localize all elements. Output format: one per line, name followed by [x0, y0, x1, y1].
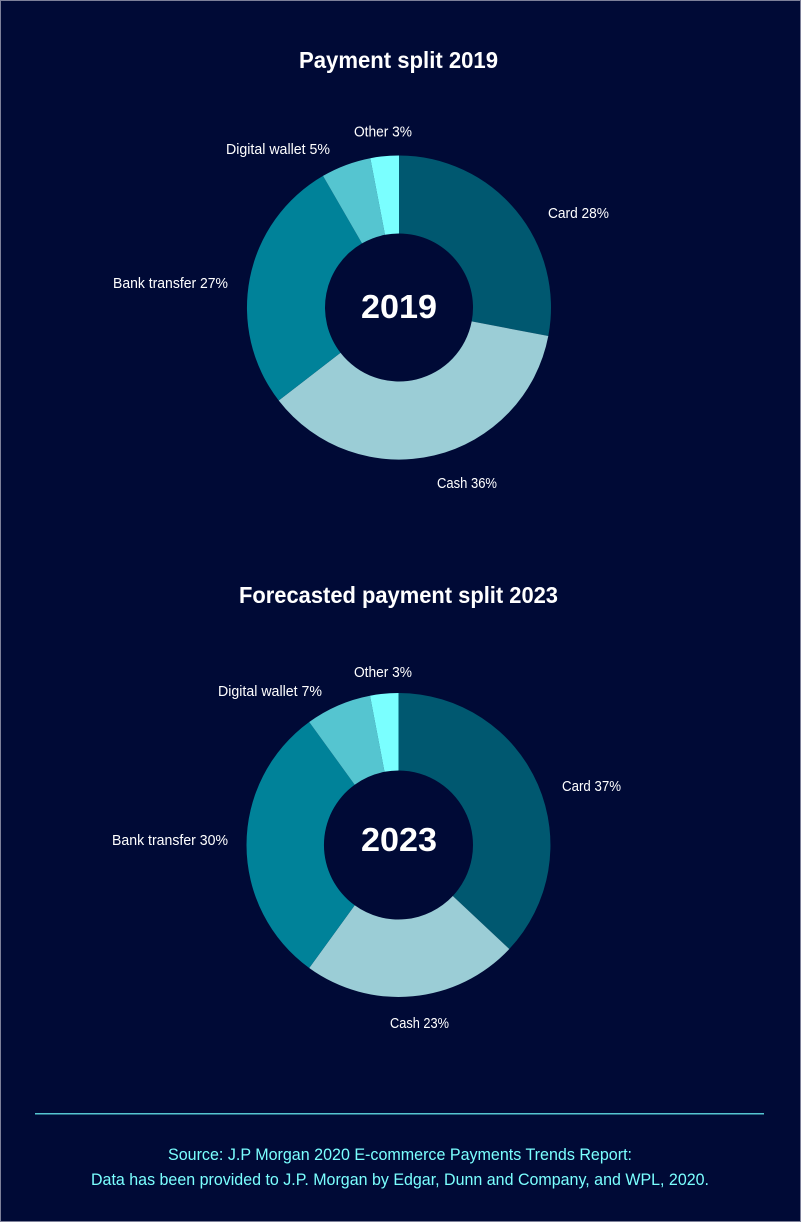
segment: digital wallet 7% [309, 696, 384, 785]
source note [91, 1146, 709, 1189]
label: card 28%: Card 28% [548, 206, 609, 222]
label: digital wallet 7%: Digital wallet 7% [218, 684, 322, 700]
segment: digital wallet 5% [323, 158, 385, 243]
segment: cash 23% [309, 896, 509, 997]
source note: Data has been provided to J.P. Morgan by Edgar, Dunn and Company, and WPL, 2020. [91, 1171, 709, 1189]
label: bank transfer 30%: Bank transfer 30% [112, 833, 228, 849]
segment: other 3% [370, 693, 398, 772]
label: other 3%: Other 3% [354, 665, 412, 681]
source note: Source: J.P Morgan 2020 E-commerce Payments Trends Report: [168, 1146, 632, 1164]
label: cash 23%: Cash 23% [390, 1016, 449, 1032]
donut chart: 2019 [247, 155, 551, 460]
segment: cash 36% [279, 321, 548, 460]
donut chart: 2023 [247, 693, 550, 997]
segment: card 28% [399, 156, 551, 336]
segment: card 37% [398, 693, 550, 949]
center label: 2023: 2023 [361, 821, 437, 858]
label: card 37%: Card 37% [562, 779, 621, 795]
label: digital wallet 5%: Digital wallet 5% [226, 142, 330, 158]
label: bank transfer 27%: Bank transfer 27% [113, 276, 228, 292]
center label: 2019: 2019 [361, 288, 437, 325]
segment: other 3% [370, 155, 399, 235]
segment: bank transfer 27% [247, 176, 362, 400]
title: forecasted payment split 2023: Forecasted payment split 2023 [239, 582, 558, 608]
segment: bank transfer 30% [247, 722, 355, 968]
label: other 3%: Other 3% [354, 124, 412, 140]
label: cash 36%: Cash 36% [437, 476, 497, 492]
title: payment split 2019: Payment split 2019 [299, 47, 498, 73]
